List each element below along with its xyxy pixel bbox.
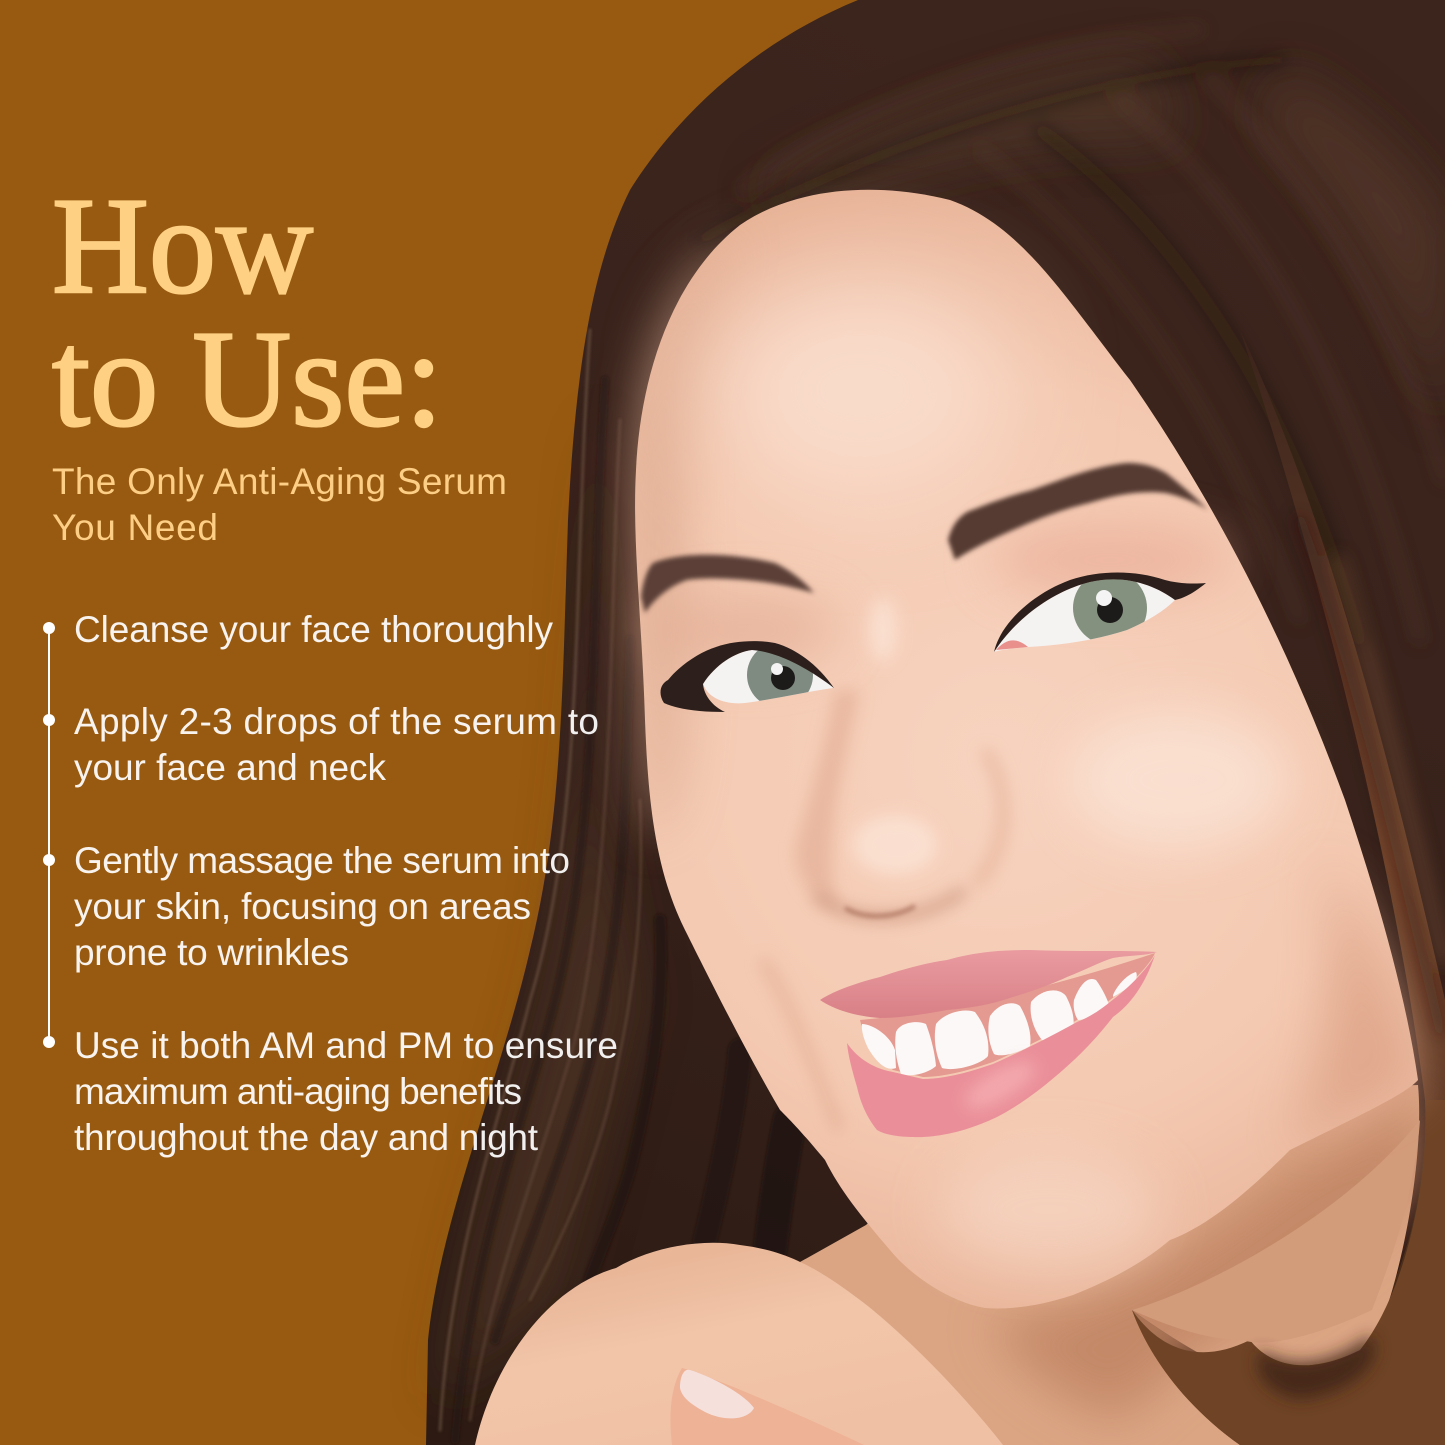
steps timeline	[43, 622, 55, 1048]
eye socket shadow left	[650, 595, 840, 665]
right eyebrow	[948, 463, 1208, 560]
shoulder	[475, 1243, 1003, 1445]
fingernail	[680, 1370, 754, 1418]
step 3 text: Gently massage the serum into	[74, 840, 570, 881]
step 3 text: prone to wrinkles	[74, 932, 349, 973]
nostril	[845, 906, 915, 916]
title	[52, 169, 443, 455]
lower lip	[847, 955, 1155, 1137]
right eye	[994, 571, 1206, 652]
subtitle line 2: You Need	[52, 507, 218, 548]
lower lip highlight	[958, 1053, 1042, 1117]
step 1 text: Cleanse your face thoroughly	[74, 609, 554, 650]
title line 1: How	[52, 169, 313, 322]
neck	[800, 1085, 1419, 1445]
nose shadow	[795, 690, 860, 908]
nose underside	[815, 890, 965, 917]
subtitle	[52, 461, 507, 548]
timeline dot 4	[43, 1036, 55, 1048]
portrait photo	[426, 0, 1445, 1445]
step 2 text: Apply 2-3 drops of the serum to	[74, 701, 599, 742]
hair curl dark core	[1257, 1335, 1375, 1400]
timeline rail	[48, 628, 50, 1042]
chin highlight	[940, 1150, 1160, 1270]
nose highlights	[853, 598, 937, 875]
hair top strands	[700, 30, 1445, 640]
nose wing shadow right	[975, 750, 1003, 885]
hair right strand detail	[1300, 520, 1445, 1400]
step 3 text: your skin, focusing on areas	[74, 886, 531, 927]
step 2 text: your face and neck	[74, 747, 386, 788]
temple shading left	[635, 230, 740, 840]
step 2 text	[74, 701, 599, 788]
upper lip	[820, 950, 1157, 1018]
subtitle line 1: The Only Anti-Aging Serum	[52, 461, 507, 502]
forehead highlight	[710, 280, 1010, 500]
hair right side lighter strands	[1132, 330, 1445, 1445]
neck shadow	[990, 1090, 1420, 1420]
step 4 text: throughout the day and night	[74, 1117, 539, 1158]
step 4 text	[74, 1025, 618, 1158]
left eyebrow	[641, 555, 814, 613]
hair back	[426, 0, 1445, 1445]
timeline dot 2	[43, 714, 55, 726]
step 3 text	[74, 840, 570, 973]
mouth interior	[860, 953, 1155, 1077]
hair curl	[1132, 1100, 1445, 1445]
eye socket shadow right	[990, 525, 1230, 595]
finger	[670, 1368, 864, 1445]
jaw shading right	[1290, 850, 1416, 1150]
title line 2: to Use:	[52, 302, 443, 455]
hair left strands	[440, 330, 790, 1440]
teeth	[862, 972, 1137, 1075]
step 4 text: maximum anti-aging benefits	[74, 1071, 522, 1112]
step 4 text: Use it both AM and PM to ensure	[74, 1025, 618, 1066]
smile crease left	[762, 960, 840, 1130]
hair curl neck patch	[1132, 1120, 1420, 1343]
cheek highlight	[1070, 710, 1290, 850]
timeline dot 3	[43, 854, 55, 866]
face	[635, 190, 1418, 1308]
left eye	[661, 641, 834, 712]
timeline dot 1	[43, 622, 55, 634]
hair top sheen	[440, 60, 1445, 1400]
